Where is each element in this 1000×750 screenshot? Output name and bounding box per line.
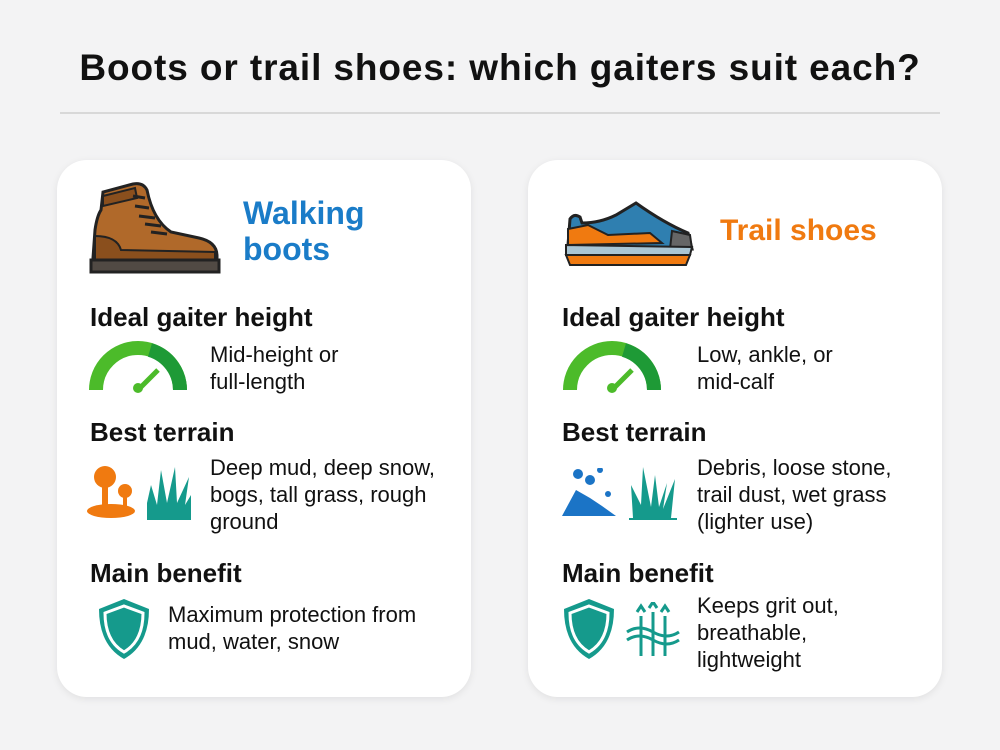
heading: ideal gaiter height: Ideal gaiter height (562, 302, 784, 332)
panel: trail shoes (528, 160, 942, 697)
text: gaiter height: mid-calf (697, 369, 774, 394)
panel: walking boots (57, 160, 471, 697)
heading: best terrain: Best terrain (562, 417, 706, 447)
icon: breathable waves (626, 602, 680, 656)
icon: shield (564, 599, 614, 659)
text: gaiter height (210, 342, 338, 394)
text: benefit: lightweight (697, 647, 801, 672)
text: terrain: (lighter use) (697, 509, 813, 534)
text: benefit (697, 593, 839, 672)
text: gaiter height: Mid-height or (210, 342, 338, 367)
heading: main benefit: Main benefit (562, 558, 714, 588)
heading: trail shoes: Trail shoes (720, 214, 877, 247)
icon: gauge (89, 341, 187, 393)
text: benefit (168, 602, 416, 654)
text: gaiter height (697, 342, 833, 394)
icon: mud (87, 466, 135, 518)
icon: gauge (563, 341, 661, 393)
heading: walking boots: boots (243, 231, 330, 267)
text: terrain: trail dust, wet grass (697, 482, 887, 507)
icon: grass (147, 467, 191, 520)
text: terrain (697, 455, 891, 534)
text: gaiter height: Low, ankle, or (697, 342, 833, 367)
text: terrain: Debris, loose stone, (697, 455, 891, 480)
text: terrain: ground (210, 509, 279, 534)
icon: boot (90, 182, 220, 274)
heading: walking boots (243, 195, 364, 267)
icon: grass (629, 467, 677, 520)
text: terrain: Deep mud, deep snow, (210, 455, 435, 480)
text: gaiter height: full-length (210, 369, 305, 394)
text: benefit: breathable, (697, 620, 807, 645)
title: Boots or trail shoes: which gaiters suit each? (79, 47, 921, 88)
icon: shield (99, 599, 149, 659)
icon: rocks (562, 468, 616, 516)
text: terrain (210, 455, 435, 534)
heading: walking boots: Walking (243, 195, 364, 231)
text: benefit: Maximum protection from (168, 602, 416, 627)
text: benefit: Keeps grit out, (697, 593, 839, 618)
icon: trail shoe (564, 201, 694, 266)
text: terrain: bogs, tall grass, rough (210, 482, 426, 507)
heading: main benefit: Main benefit (90, 558, 242, 588)
text: benefit: mud, water, snow (168, 629, 339, 654)
heading: best terrain: Best terrain (90, 417, 234, 447)
heading: ideal gaiter height: Ideal gaiter height (90, 302, 312, 332)
